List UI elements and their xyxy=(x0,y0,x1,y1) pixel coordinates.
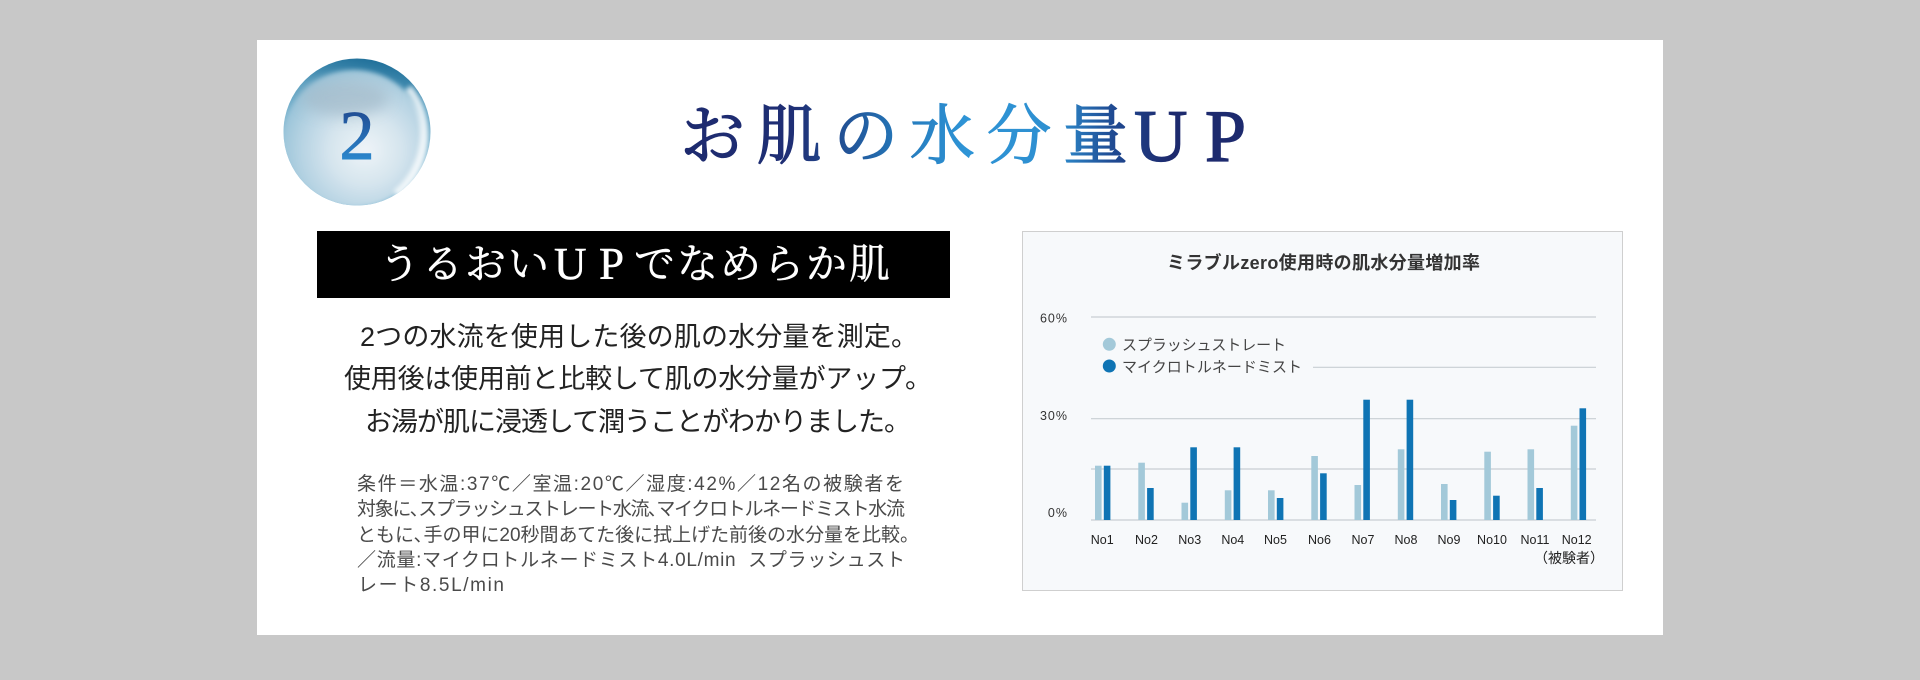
y axis labels: 0% xyxy=(1048,506,1068,520)
legend: スプラッシュストレート xyxy=(1122,337,1286,354)
chart title: ミラブルzero使用時の肌水分量増加率 xyxy=(1167,252,1480,273)
black banner heading xyxy=(317,231,950,298)
x axis labels: No3 xyxy=(1178,533,1201,547)
body text: 使用後は使用前と比較して肌の水分量がアップ。 xyxy=(344,364,932,394)
black banner heading: うるおい xyxy=(379,241,549,287)
conditions note xyxy=(357,473,919,596)
x axis labels: No10 xyxy=(1477,533,1507,547)
white card xyxy=(257,40,1663,635)
conditions note: レート8.5L/min xyxy=(358,575,504,596)
title: お肌の水分量 xyxy=(680,101,1128,173)
conditions note: ／流量:マイクロトルネードミスト4.0L/min スプラッシュスト xyxy=(357,549,905,571)
black banner heading: でなめらか肌 xyxy=(634,241,890,287)
body text xyxy=(344,322,932,437)
x axis labels: No2 xyxy=(1135,533,1158,547)
number 2: 2 xyxy=(340,98,374,175)
bars: splash straight xyxy=(1095,426,1577,520)
x axis labels xyxy=(1091,533,1604,566)
x axis labels: No12 xyxy=(1562,533,1592,547)
legend xyxy=(1103,337,1302,376)
x axis labels: No9 xyxy=(1438,533,1461,547)
conditions note: 条件＝水温:37℃／室温:20℃／湿度:42%／12名の被験者を xyxy=(357,473,904,495)
icon: numbered water droplet xyxy=(283,58,430,208)
y axis labels: 60% xyxy=(1040,312,1068,326)
x axis labels: No11 xyxy=(1521,533,1550,547)
legend: マイクロトルネードミスト xyxy=(1122,359,1302,376)
body text: 2つの水流を使用した後の肌の水分量を測定。 xyxy=(360,322,918,352)
body text: お湯が肌に浸透して潤うことがわかりました。 xyxy=(365,407,911,437)
y axis labels: 30% xyxy=(1040,409,1068,423)
x axis labels: No6 xyxy=(1308,533,1331,547)
conditions note: 対象に､スプラッシュストレート水流､マイクロトルネードミスト水流 xyxy=(357,498,905,520)
panel: bar chart xyxy=(1022,232,1622,590)
title xyxy=(680,96,1246,178)
x axis labels: No4 xyxy=(1221,533,1244,547)
x axis labels: No8 xyxy=(1395,533,1418,547)
x axis labels: No5 xyxy=(1264,533,1287,547)
x axis labels: No7 xyxy=(1352,533,1375,547)
title: UP xyxy=(1134,96,1246,178)
conditions note: ともに､手の甲に20秒間あてた後に拭上げた前後の水分量を比較。 xyxy=(357,524,919,546)
bars: micro tornado mist xyxy=(1104,400,1586,520)
x axis labels: No1 xyxy=(1091,533,1114,547)
y axis labels xyxy=(1040,312,1068,520)
x axis labels: （被験者） xyxy=(1534,550,1604,566)
black banner heading: UP xyxy=(554,239,624,289)
